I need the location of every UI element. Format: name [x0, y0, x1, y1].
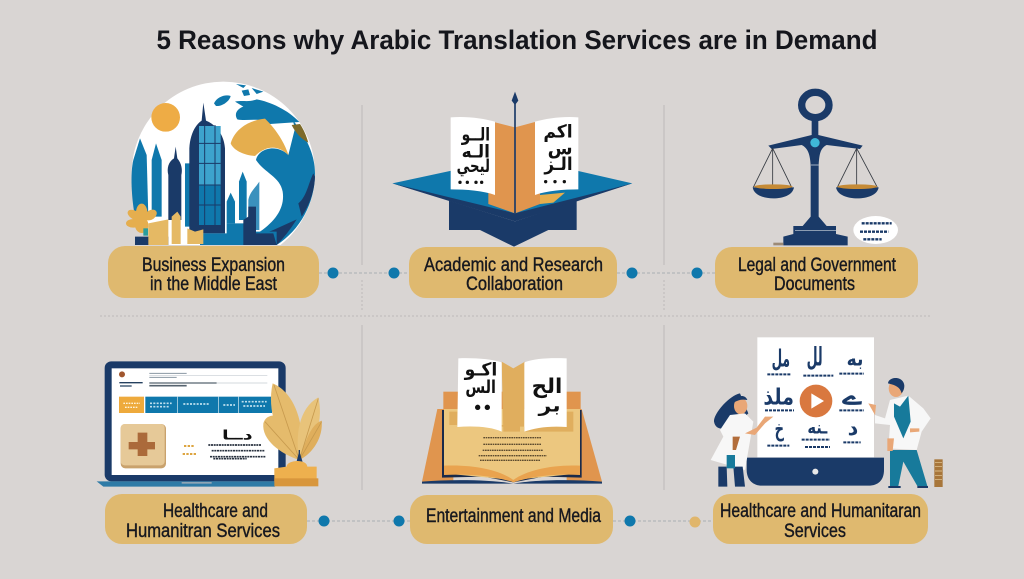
icon: book on graduation cap: س [548, 139, 573, 160]
icon: doctors presenting video screen: ے [841, 382, 863, 410]
title: 5 Reasons why Arabic Translation Services are in Demand [156, 25, 878, 55]
icon: book on graduation cap: اكم [543, 121, 573, 142]
panel: academic and research [392, 92, 632, 298]
icon: doctors presenting video screen: لل [807, 343, 823, 373]
label pill: legal and government: Legal and Government [738, 255, 897, 276]
icon: open book: بر [537, 396, 561, 417]
label pill: entertainment and media [410, 495, 613, 544]
icon: doctors presenting video screen: د [848, 416, 858, 440]
label pill: business expansion [108, 246, 319, 298]
panel: business expansion [108, 82, 319, 298]
icon: laptop with plant [97, 361, 322, 487]
label pill: legal and government [715, 247, 918, 298]
icon: doctors presenting video screen: ـنه [807, 417, 828, 438]
connector dots [318, 268, 702, 528]
icon: book on graduation cap: الـه [462, 141, 490, 162]
icon: open book: اكـو [464, 360, 497, 381]
panel: healthcare and humanitarian [711, 337, 943, 544]
icon: open book [422, 358, 602, 484]
icon: book on graduation cap: الــو [461, 125, 490, 146]
icon: balance scales [753, 92, 898, 245]
label pill: entertainment and media: Entertainment and Media [426, 506, 601, 527]
icon: doctors presenting video screen: ملذ [763, 384, 794, 410]
panel: entertainment and media [410, 358, 613, 544]
label pill: healthcare and humanitaran: Healthcare and Humanitaran [720, 501, 921, 522]
label pill: healthcare and humanitaran [713, 494, 928, 544]
icon: open book: الح [532, 374, 562, 398]
label pill: academic and research: Collaboration [466, 274, 563, 295]
label pill: healthcare and humanitran: Healthcare and [163, 501, 268, 522]
icon: book on graduation cap: الـز [543, 154, 573, 175]
label pill: healthcare and humanitaran: Services [784, 521, 846, 542]
label pill: legal and government: Documents [774, 274, 855, 295]
icon: book on graduation cap: ليحي [457, 156, 490, 177]
label pill: healthcare and humanitran [105, 494, 307, 544]
icon: doctors presenting video screen: مل [772, 345, 790, 373]
label pill: academic and research: Academic and Research [424, 255, 603, 276]
icon: open book: الس [465, 377, 496, 398]
label pill: business expansion: Business Expansion [142, 255, 285, 276]
panel: healthcare laptop [97, 361, 322, 544]
label pill: healthcare and humanitran: Humanitran Services [126, 521, 280, 542]
label pill: academic and research [409, 247, 617, 298]
label pill: business expansion: in the Middle East [150, 274, 278, 295]
panel: legal and government [715, 92, 918, 298]
icon: globe and skyline [126, 82, 315, 245]
icon: laptop with plant: دــا [222, 428, 253, 443]
icon: doctors presenting video screen: خ [775, 418, 784, 443]
icon: doctors presenting video screen: به [847, 348, 863, 371]
icon: book on graduation cap [392, 92, 632, 247]
icon: doctors presenting video screen [711, 337, 943, 488]
